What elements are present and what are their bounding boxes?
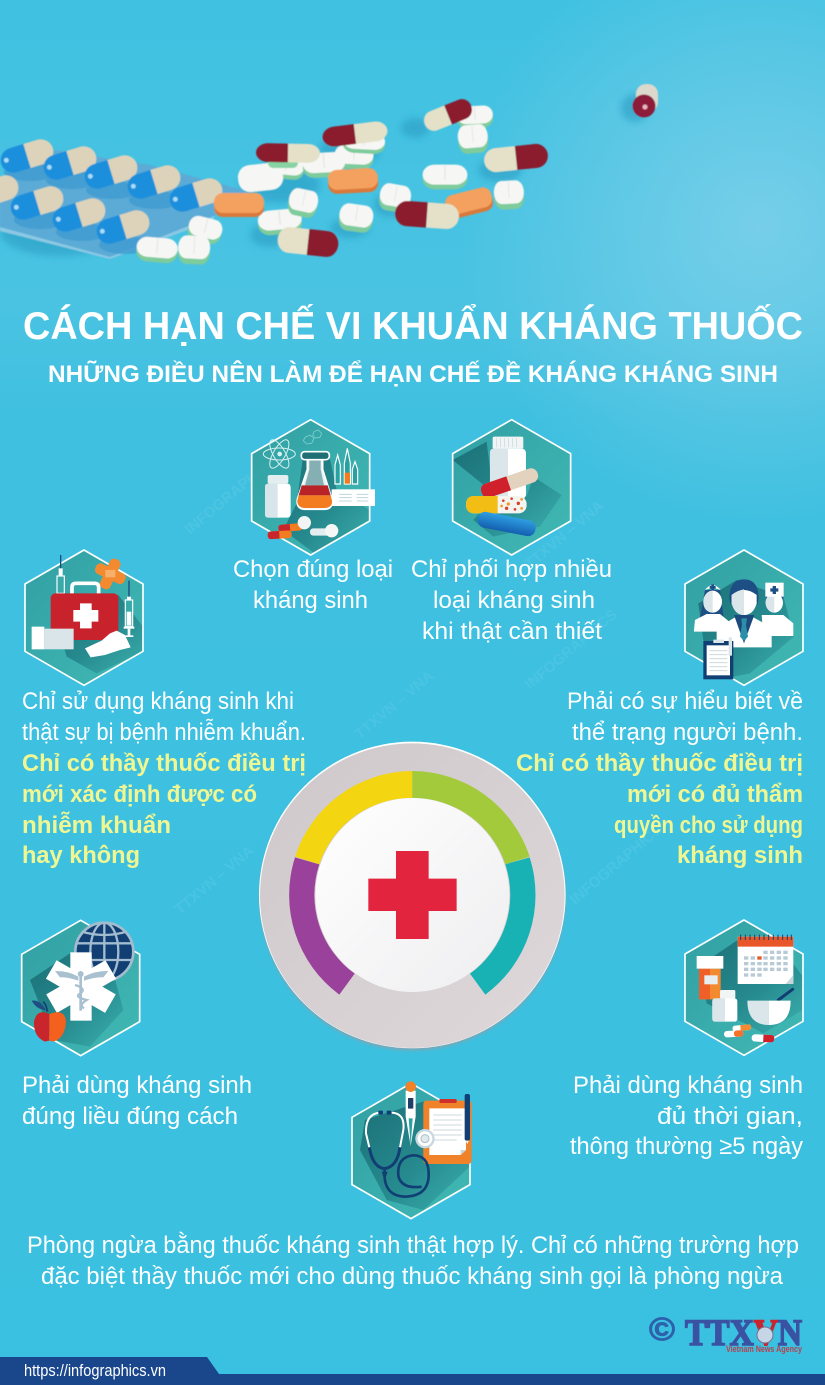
text: right column: Phải có sự hiểu biết về [567, 688, 803, 715]
watermarks [172, 451, 666, 918]
text: left column: mới xác định được có [22, 781, 257, 808]
subtitle: NHỮNG ĐIỀU NÊN LÀM ĐỂ HẠN CHẾ ĐỀ KHÁNG KHÁNG SINH [48, 360, 778, 388]
ring segment green [412, 771, 530, 864]
logo: TTXVN: Vietnam News Agency [726, 1344, 802, 1354]
text: combine only when necessary [411, 556, 612, 645]
logo: TTXVN: © [649, 1311, 675, 1347]
text: left column: nhiễm khuẩn [22, 811, 171, 839]
red and cream capsules [256, 96, 549, 258]
orange tablets [214, 168, 495, 220]
text: combine only when necessary: Chỉ phối hợp nhiều [411, 556, 612, 583]
text: left column: Chỉ sử dụng kháng sinh khi [22, 688, 294, 715]
text: choose right antibiotic: Chọn đúng loại [233, 556, 393, 583]
blue capsules [0, 136, 225, 247]
icon: calendar and medicine hexagon [685, 920, 803, 1055]
text: full duration: đủ thời gian, [657, 1103, 803, 1130]
text: full duration [570, 1072, 803, 1160]
text: left column: thật sự bị bệnh nhiễm khuẩn. [22, 719, 306, 746]
icon: lab flask and bottle hexagon, capsules hexagon [252, 420, 571, 555]
text: right column: thể trạng người bệnh. [572, 719, 803, 746]
text: right column: Chỉ có thầy thuốc điều trị [516, 750, 803, 777]
ring segment yellow [295, 771, 412, 864]
text: prevention paragraph: Phòng ngừa bằng thuốc kháng sinh thật hợp lý. Chỉ có những trường hợp [27, 1232, 799, 1259]
footer bar [0, 1357, 825, 1385]
icon: flask hexagon [252, 420, 375, 555]
lone capsule upper right [632, 84, 658, 118]
pill shadows [0, 94, 649, 256]
text: full duration: Phải dùng kháng sinh [573, 1072, 803, 1099]
text: choose right antibiotic: kháng sinh [253, 587, 368, 614]
text: right dose: đúng liều đúng cách [22, 1103, 238, 1130]
icon: star of life hexagon [22, 920, 140, 1056]
inner white circle [315, 798, 509, 992]
icon: medical team hexagon [685, 550, 803, 685]
footer bar: https://infographics.vn [24, 1361, 166, 1380]
text: left column: hay không [22, 842, 140, 869]
text: left column [22, 688, 306, 869]
watermarks: INFOGRAPHICS [567, 821, 666, 908]
red cross [368, 851, 457, 939]
icon: stethoscope hexagon [352, 1081, 472, 1219]
watermarks: TTXVN – VNA [352, 667, 437, 743]
text: right column: mới có đủ thẩm [627, 781, 803, 808]
watermarks: INFOGRAPHICS [522, 606, 621, 693]
center medical disc [259, 742, 566, 1050]
text: right column [516, 688, 803, 869]
text: prevention paragraph [27, 1232, 799, 1290]
text: full duration: thông thường ≥5 ngày [570, 1133, 803, 1160]
blister pack [0, 150, 248, 259]
scattered tablets [135, 105, 525, 265]
text: combine only when necessary: khi thật cần thiết [422, 618, 602, 645]
icon: first aid hexagon [25, 550, 143, 685]
text: right column: kháng sinh [677, 842, 803, 869]
logo: TTXVN: TTXVN [685, 1313, 802, 1354]
text: left column: Chỉ có thầy thuốc điều trị [22, 750, 306, 777]
ring segment purple [289, 857, 355, 995]
text: combine only when necessary: loại kháng sinh [433, 587, 595, 614]
text: right dose [22, 1072, 252, 1130]
photo: pills and blister pack [0, 84, 658, 265]
text: choose right antibiotic [233, 556, 393, 614]
watermarks: INFOGRAPHICS [182, 451, 281, 538]
ring segment teal [470, 857, 536, 995]
text: prevention paragraph: đặc biệt thầy thuốc mới cho dùng thuốc kháng sinh gọi là phòng ngừa [41, 1263, 784, 1290]
icon: capsules hexagon [453, 420, 571, 555]
watermarks: TTXVN – VNA [522, 497, 607, 573]
text: right dose: Phải dùng kháng sinh [22, 1072, 252, 1099]
watermarks: TTXVN – VNA [172, 842, 257, 918]
title: CÁCH HẠN CHẾ VI KHUẨN KHÁNG THUỐC [23, 303, 803, 348]
